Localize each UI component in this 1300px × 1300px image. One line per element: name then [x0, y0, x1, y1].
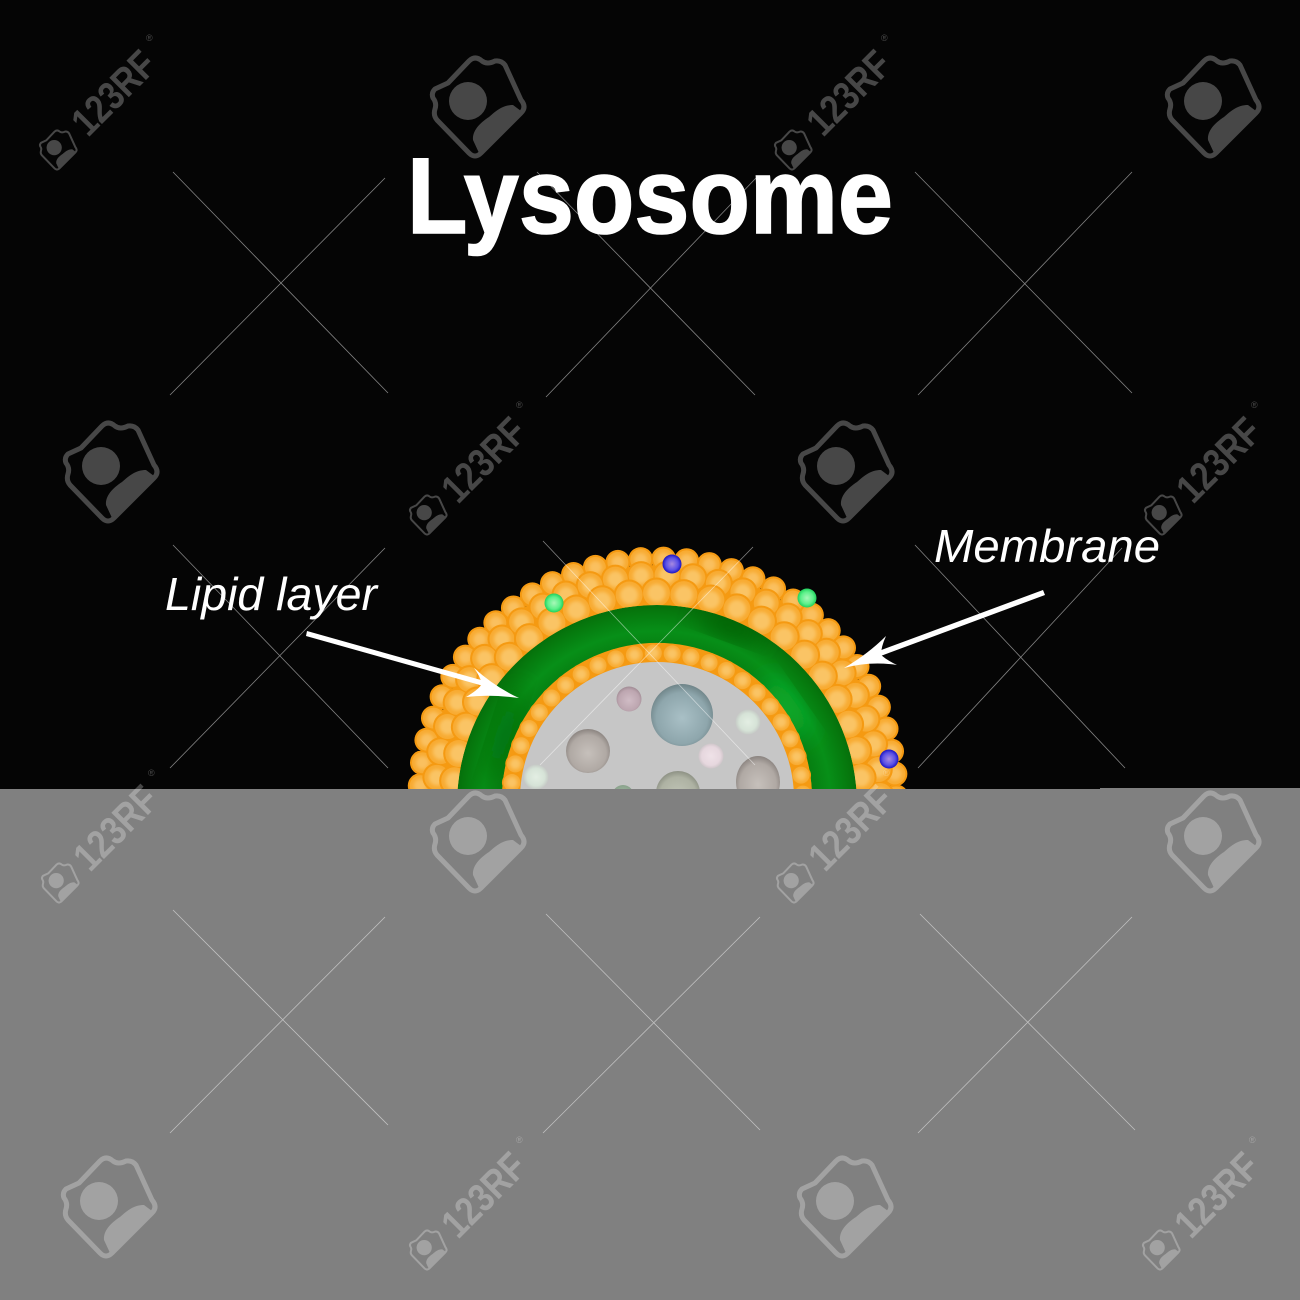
arrow: membrane pointer	[844, 590, 1045, 668]
label: Membrane: Membrane	[934, 520, 1160, 572]
watermark: 123RF wordmarks: 123RF	[1168, 410, 1270, 511]
watermark: 123RF wordmarks: 123RF	[798, 43, 900, 144]
watermark: 123RF wordmarks: 123RF	[433, 410, 535, 511]
arrow: lipid layer pointer	[306, 631, 519, 698]
watermark: 123RF wordmarks: ®	[883, 768, 890, 778]
watermark crosses	[170, 172, 1135, 1133]
membrane: outer orange ball layer	[408, 546, 908, 789]
lysosome diagram	[408, 546, 908, 789]
watermark: 123RF wordmarks: 123RF	[63, 43, 165, 144]
watermark: 123RF wordmarks: 123RF	[433, 1145, 535, 1246]
title: Lysosome	[407, 135, 893, 256]
grey lower panel	[0, 788, 1300, 1300]
lysosome interior	[520, 662, 794, 789]
enzyme vesicles inside the lumen	[524, 684, 780, 789]
watermark: 123RF wordmarks: ®	[148, 768, 155, 778]
background: black upper area	[0, 0, 1300, 790]
watermark: 123RF wordmarks: ®	[881, 33, 888, 43]
watermark: 123RF wordmarks: 123RF	[800, 778, 902, 879]
watermark: 123RF wordmarks: ®	[1251, 400, 1258, 410]
watermark: 123RF wordmarks: ®	[1249, 1135, 1256, 1145]
label: Lipid layer: Lipid layer	[165, 568, 379, 620]
watermark: 123RF wordmarks: ®	[146, 33, 153, 43]
watermark: 123RF wordmarks: 123RF	[65, 778, 167, 879]
lipid layer: inner orange ball ring	[502, 644, 812, 789]
green band	[458, 605, 856, 789]
surface proteins: blue and green dots	[544, 554, 898, 768]
watermark: 123RF wordmarks: 123RF	[1166, 1145, 1268, 1246]
watermark: 123RF wordmarks: ®	[516, 400, 523, 410]
watermark: 123RF wordmarks: ®	[516, 1135, 523, 1145]
